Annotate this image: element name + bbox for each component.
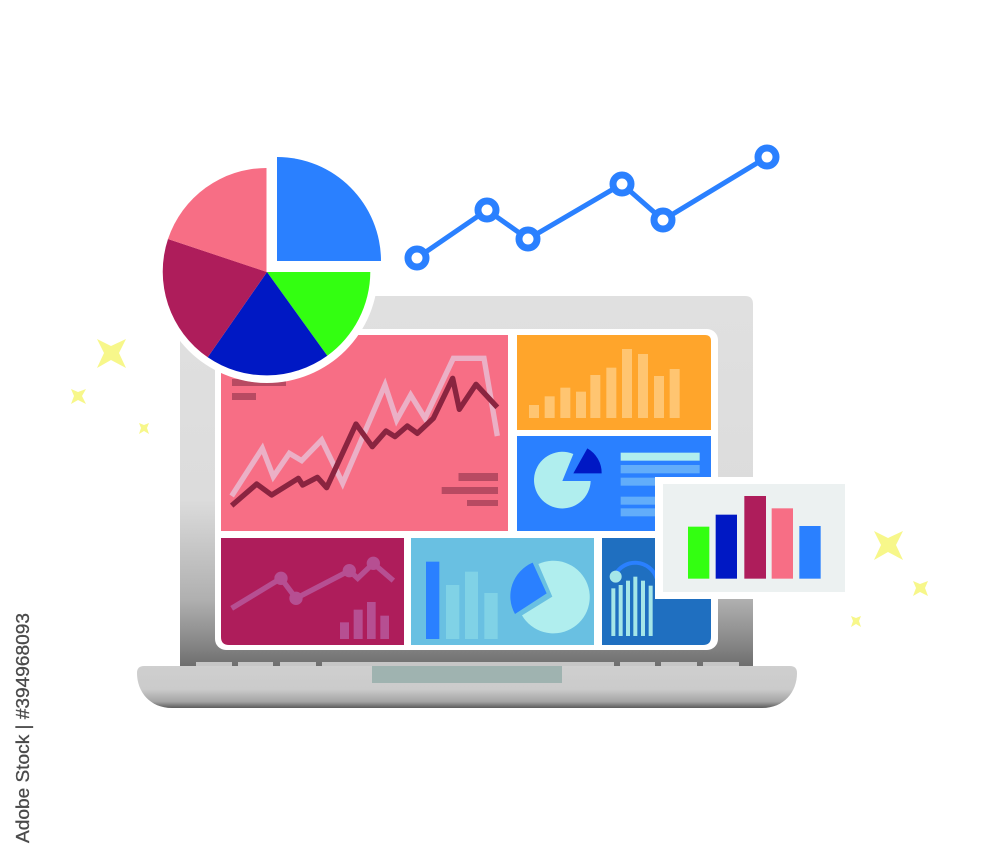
gauge dot <box>610 571 622 583</box>
laptop base <box>137 666 797 708</box>
light line series <box>232 358 497 496</box>
dark line series <box>232 378 497 506</box>
slice: green <box>267 272 370 356</box>
orange bars <box>529 349 680 418</box>
thin bars <box>611 577 653 636</box>
keyboard keys <box>196 662 739 666</box>
rising line chart <box>408 148 776 267</box>
sparkles left <box>71 339 149 434</box>
card bars <box>688 496 821 579</box>
slice: exploded blue <box>277 157 381 261</box>
panel: dark blue gauge bars <box>602 538 711 645</box>
pie chart <box>156 157 381 383</box>
legend bars bottom right <box>442 473 498 506</box>
sparkles right <box>851 531 928 627</box>
laptop lid <box>180 296 753 666</box>
panel: light blue bars and pie <box>411 538 594 645</box>
panel: crimson trend chart <box>221 538 404 645</box>
panel: orange bar chart <box>517 335 711 430</box>
pie <box>510 561 590 633</box>
laptop screen frame <box>215 329 718 650</box>
panel: blue pie and list <box>517 436 711 531</box>
mini bars <box>340 602 389 639</box>
trend line with markers <box>232 557 393 608</box>
bars <box>426 562 498 639</box>
list rows <box>621 453 700 516</box>
side credit label: Adobe Stock | #394968093 <box>12 613 33 843</box>
small pie chart <box>534 448 602 508</box>
slice: pink <box>168 168 266 272</box>
gauge arc <box>615 563 657 578</box>
floating bar chart card <box>655 477 852 599</box>
slice: crimson <box>163 239 267 357</box>
panel: main line chart <box>221 335 508 531</box>
slice: dark blue <box>208 272 327 375</box>
trackpad <box>372 666 562 683</box>
legend bars top left <box>232 379 286 400</box>
